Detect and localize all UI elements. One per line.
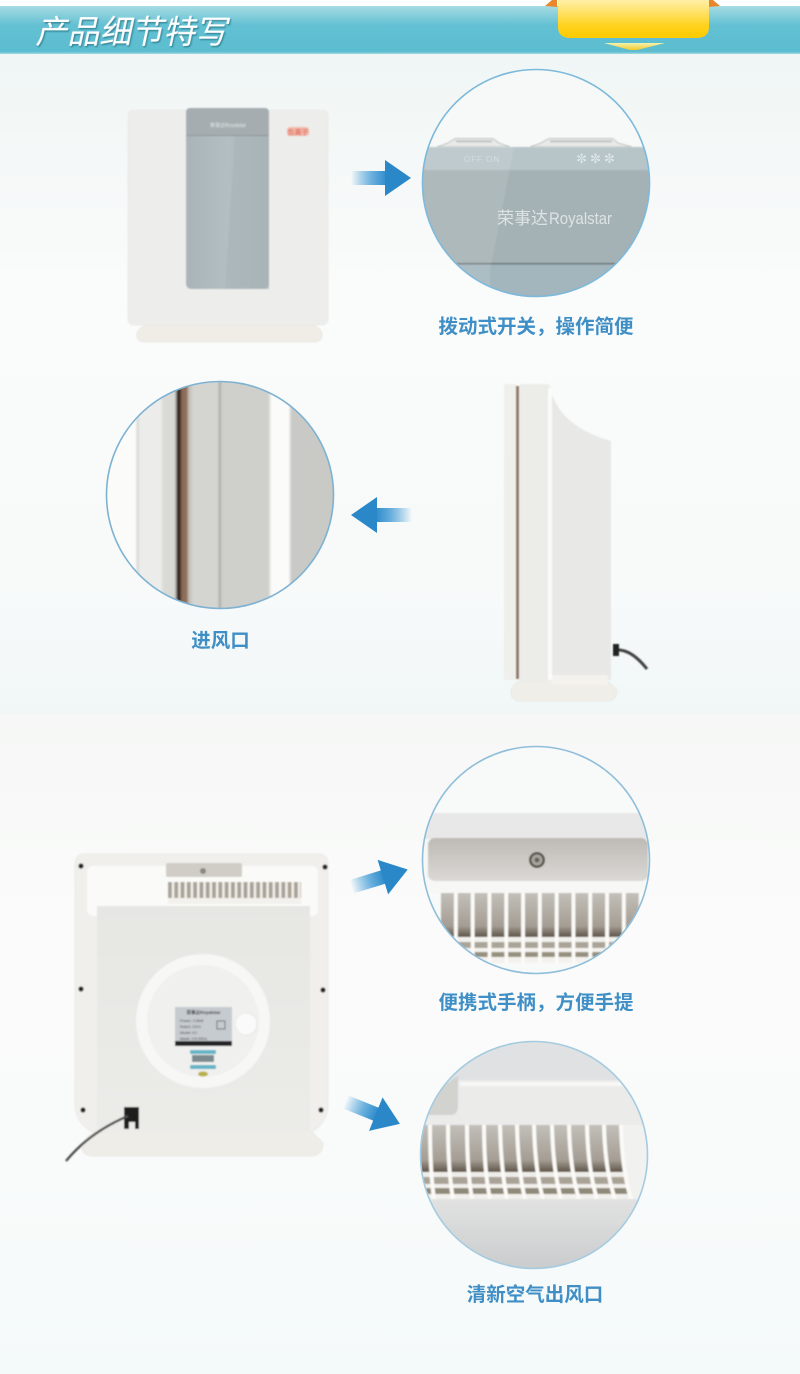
body: [128, 110, 328, 325]
top cavity: [87, 866, 318, 916]
arrow to outlet detail: [338, 1085, 407, 1141]
front panel: [519, 384, 550, 682]
air outlet grille: [168, 882, 301, 904]
base: [82, 1130, 323, 1156]
base: [511, 680, 617, 701]
rating label: 荣事达Royalstar: [186, 1009, 221, 1016]
caption: air outlet: 清新空气出风口: [467, 1283, 603, 1306]
screw: [529, 852, 545, 868]
caption: air inlet: 进风口: [191, 630, 250, 652]
power cable: [613, 644, 647, 669]
detail circle: air outlet: [418, 1040, 650, 1271]
detail circle: switches: [420, 68, 652, 304]
power socket and cable: [66, 1107, 139, 1161]
handle: [166, 863, 242, 877]
switch buttons: [437, 138, 632, 147]
rating label: Power: 2.5kW: [180, 1019, 204, 1023]
barcode sticker: [190, 1050, 216, 1076]
handle recess: [428, 838, 648, 881]
red logo: 负离子: [288, 128, 308, 136]
corner notch: [429, 1076, 458, 1116]
rating label: Model: KJ: [180, 1031, 197, 1035]
screws: [78, 863, 328, 1113]
panel lettering: OFF ON: [464, 155, 500, 164]
product photo: side view: [504, 384, 647, 701]
brand on panel: 荣事达Royalstar: [210, 122, 246, 129]
rating label: Rated: 220V: [180, 1025, 202, 1029]
stand foot: [552, 675, 608, 685]
arrow to air inlet detail: [351, 497, 412, 533]
vent fins: [418, 1125, 650, 1199]
detail circle: carry handle: [420, 745, 652, 977]
base: [137, 325, 322, 342]
back panel: [97, 906, 310, 1131]
rear housing: [550, 385, 611, 680]
header banner: [0, 0, 800, 54]
vent fins: [441, 893, 641, 963]
arrow to handle detail: [346, 852, 413, 904]
glass panel: [186, 108, 269, 289]
panel face: [420, 147, 652, 304]
detail circle: air inlet: [100, 375, 340, 615]
brand name: 荣事达Royalstar: [497, 209, 612, 228]
rating label: [175, 1007, 232, 1046]
header bar: [0, 6, 800, 54]
arrow to switch detail: [351, 160, 411, 196]
round seal: [235, 1013, 257, 1035]
outer frame: [75, 854, 328, 1132]
rating label: Made: CN 50Hz: [180, 1037, 207, 1041]
product photo: rear view: [66, 854, 328, 1161]
caption: carry handle: 便携式手柄，方便手提: [438, 991, 634, 1014]
filter edge: [504, 384, 516, 680]
yellow badge: [545, 0, 720, 50]
round fan cover: [136, 954, 270, 1088]
heading title: 产品细节特写: [34, 14, 233, 50]
caption: switch: 拨动式开关，操作简便: [438, 316, 634, 338]
top band: [420, 813, 652, 839]
product photo: front view: [128, 108, 328, 342]
lower body: [430, 1198, 638, 1268]
fan speed icons: ✼✼✼: [576, 151, 618, 166]
